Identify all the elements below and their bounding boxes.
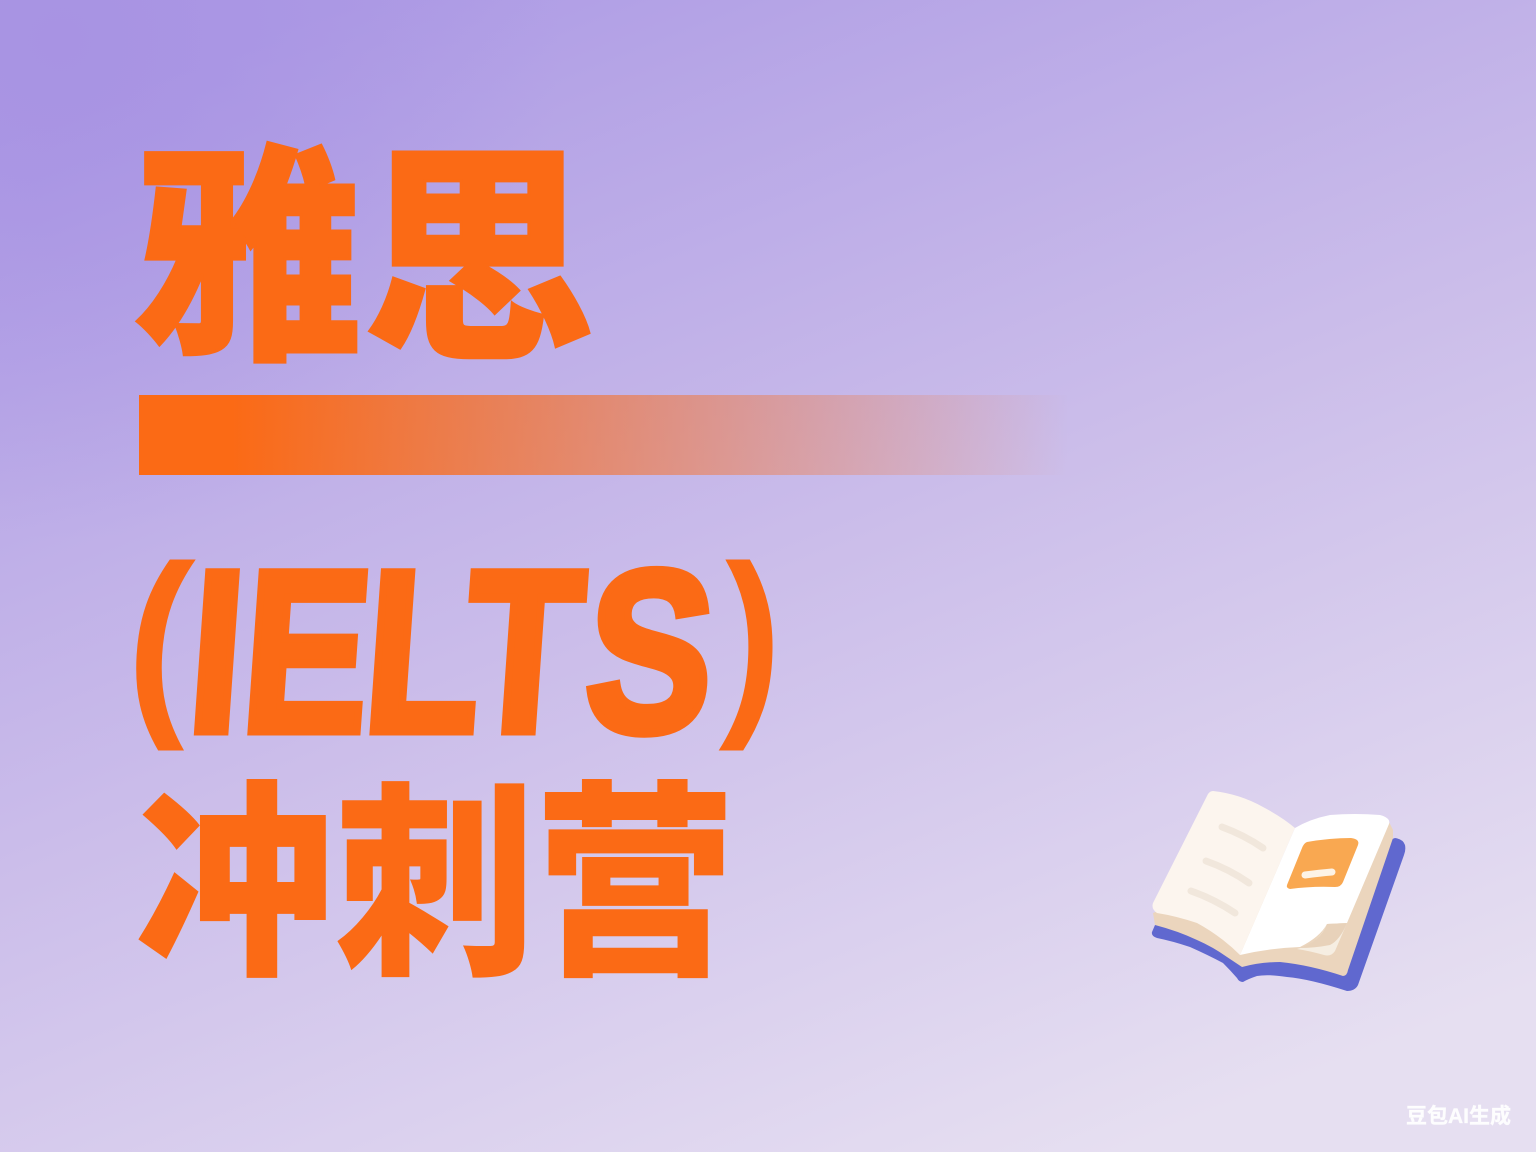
left page <box>1152 791 1295 955</box>
heading: 冲刺营: 冲刺营 <box>135 770 735 1002</box>
heading: 雅思: 雅思 <box>132 131 594 389</box>
IELTS letters: IELTS <box>182 522 722 780</box>
page block <box>1153 820 1393 976</box>
left page lines <box>1191 827 1263 913</box>
label line <box>1305 872 1332 875</box>
right page <box>1240 814 1389 955</box>
orange label <box>1287 838 1358 889</box>
book cover <box>1152 838 1405 991</box>
decorative gradient bar <box>139 395 1069 475</box>
watermark: 豆包AI生成 <box>1406 1104 1511 1128</box>
icon: open book <box>1152 791 1405 991</box>
opening parenthesis: ( <box>121 523 198 752</box>
heading: (IELTS) <box>121 522 786 780</box>
closing parenthesis: ) <box>718 522 786 752</box>
page curl <box>1297 923 1347 956</box>
